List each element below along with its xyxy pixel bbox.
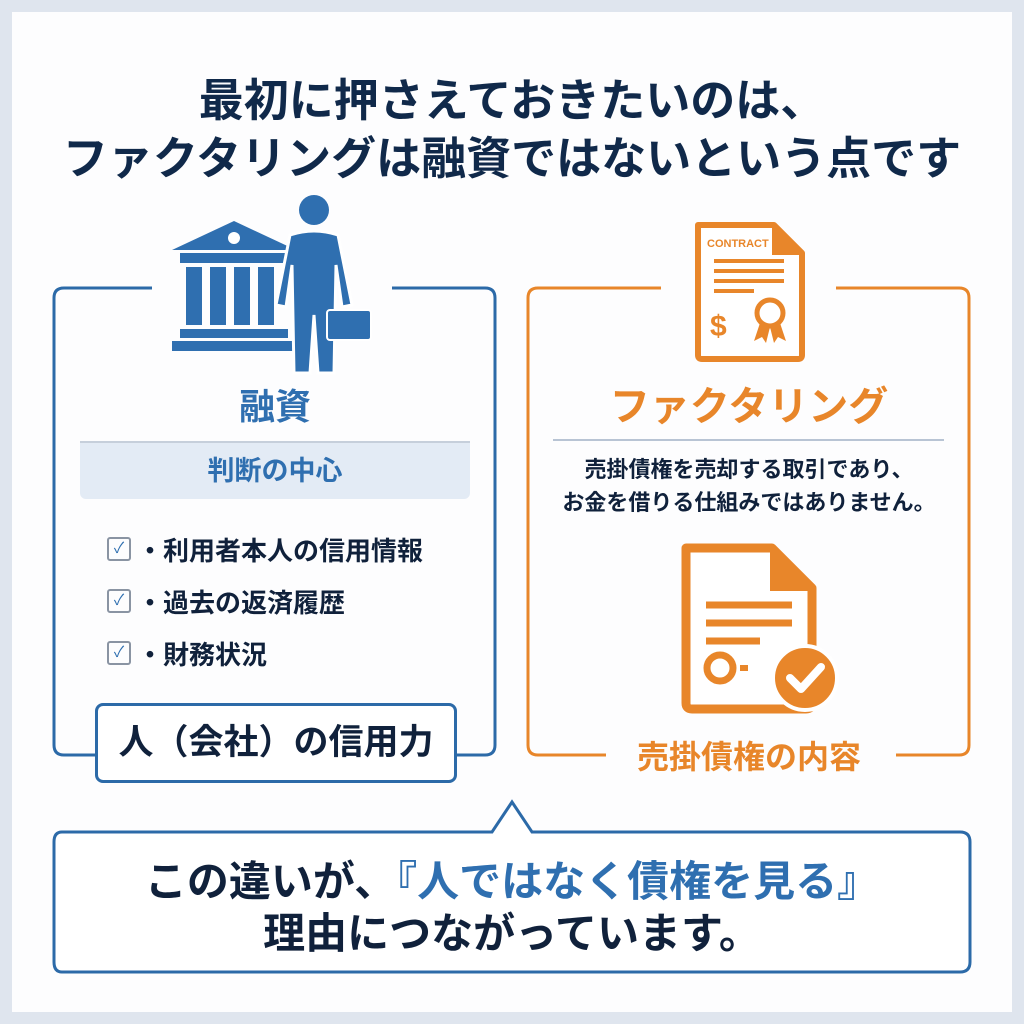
checklist: ✓ (114, 592, 124, 609)
icon: contract: $ (710, 310, 727, 343)
title: ファクタリングは融資ではないという点です (63, 133, 961, 184)
title (63, 75, 961, 184)
panel: factoring (526, 222, 970, 775)
checklist: ・財務状況 (137, 640, 267, 670)
checklist: ✓ (114, 540, 124, 557)
description: お金を借りる仕組みではありません。 (562, 490, 936, 515)
icon: contract (695, 222, 805, 362)
callout: conclusion: 理由につながっています。 (263, 910, 761, 957)
result box: 人（会社）の信用力: 人（会社）の信用力 (118, 723, 434, 762)
callout: conclusion: この違いが、『人ではなく債権を見る』 (145, 858, 879, 905)
label band: 判断の中心 (80, 441, 470, 499)
label band: 判断の中心: 判断の中心 (208, 456, 342, 486)
heading: ファクタリング: ファクタリング (610, 385, 888, 429)
result box: 人（会社）の信用力 (95, 703, 457, 783)
icon: document with check (682, 544, 835, 714)
heading: 融資: 融資 (239, 386, 311, 427)
checklist: ・利用者本人の信用情報 (137, 536, 423, 566)
label: 売掛債権の内容: 売掛債権の内容 (637, 739, 861, 775)
checklist (107, 536, 423, 670)
icon: contract: CONTRACT (707, 238, 769, 250)
checklist: ・過去の返済履歴 (137, 588, 345, 618)
title: 最初に押さえておきたいのは、 (199, 75, 825, 126)
divider (553, 439, 944, 441)
panel: loan (52, 195, 496, 783)
description (562, 457, 936, 515)
checklist: ✓ (114, 644, 124, 661)
description: 売掛債権を売却する取引であり、 (585, 457, 913, 482)
callout: conclusion (52, 799, 972, 974)
icon: bank and businessman (172, 195, 370, 372)
